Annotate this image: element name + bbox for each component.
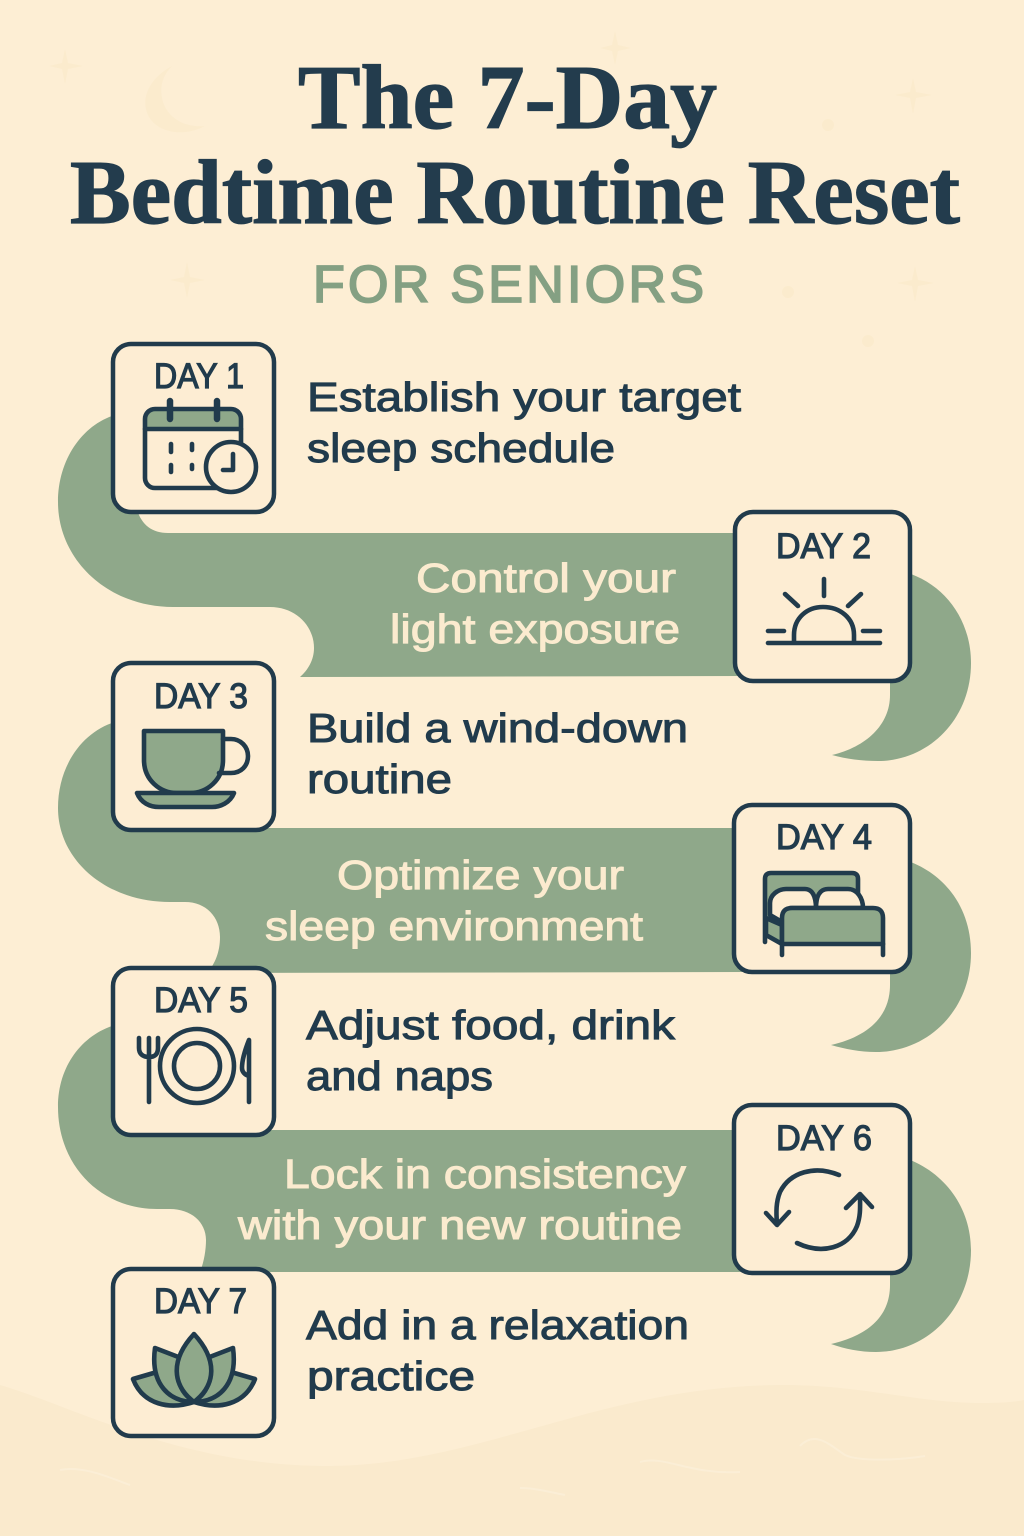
day 2 label: DAY 2 bbox=[776, 527, 871, 566]
icon: bed bbox=[765, 873, 883, 955]
day 4 badge bbox=[734, 805, 910, 972]
day 7 badge bbox=[113, 1269, 274, 1436]
day 4 text: sleep environment bbox=[265, 903, 644, 949]
day 5 text bbox=[306, 1002, 676, 1099]
day 7 text bbox=[306, 1302, 689, 1399]
day 1 text: Establish your target bbox=[307, 374, 742, 420]
title: Bedtime Routine Reset bbox=[70, 142, 960, 243]
icon: tea cup bbox=[137, 731, 248, 807]
day 1 text: sleep schedule bbox=[307, 425, 615, 471]
icon: calendar with clock bbox=[144, 401, 256, 492]
title bbox=[70, 47, 960, 243]
icon: cycle arrows bbox=[766, 1170, 872, 1249]
day 1 text bbox=[307, 374, 742, 471]
day 4 label: DAY 4 bbox=[776, 818, 872, 857]
ribbon: days 3 to 5 bbox=[58, 722, 971, 1052]
day 6 badge bbox=[734, 1105, 910, 1273]
ribbon: days 5 to 7 bbox=[58, 1025, 971, 1352]
day 4 text: Optimize your bbox=[337, 852, 624, 898]
icon: lotus bbox=[133, 1334, 255, 1405]
day 3 badge bbox=[113, 663, 274, 830]
day 6 text: with your new routine bbox=[237, 1202, 682, 1248]
background stars and moon bbox=[49, 31, 934, 347]
day 3 text: routine bbox=[307, 756, 452, 802]
day 3 label: DAY 3 bbox=[154, 677, 248, 716]
day 7 text: practice bbox=[307, 1353, 475, 1399]
icon: plate and cutlery bbox=[139, 1029, 249, 1103]
day 1 badge bbox=[113, 344, 274, 512]
panel: day 7 bbox=[113, 1269, 689, 1436]
day 5 text: Adjust food, drink bbox=[306, 1002, 676, 1048]
panel: day 1 bbox=[113, 344, 742, 512]
panel: day 4 bbox=[265, 805, 910, 972]
day 2 text bbox=[390, 555, 680, 652]
day 5 text: and naps bbox=[306, 1053, 493, 1099]
panel: day 3 bbox=[113, 663, 688, 830]
background hills bbox=[0, 1385, 1024, 1536]
day 5 badge bbox=[113, 968, 274, 1135]
day 2 badge bbox=[735, 512, 910, 681]
title: The 7-Day bbox=[298, 47, 717, 148]
day 6 label: DAY 6 bbox=[776, 1119, 872, 1158]
day 2 text: light exposure bbox=[390, 606, 680, 652]
panel: day 5 bbox=[113, 968, 676, 1135]
day 3 text bbox=[307, 705, 688, 802]
icon: sunrise bbox=[768, 579, 880, 643]
day 5 label: DAY 5 bbox=[154, 981, 248, 1020]
day 7 text: Add in a relaxation bbox=[306, 1302, 689, 1348]
day 4 text bbox=[265, 852, 644, 949]
day 3 text: Build a wind-down bbox=[307, 705, 688, 751]
day 1 label: DAY 1 bbox=[154, 357, 244, 396]
day 6 text bbox=[237, 1151, 687, 1248]
subtitle: FOR SENIORS bbox=[313, 256, 704, 314]
day 2 text: Control your bbox=[416, 555, 676, 601]
panel: day 2 bbox=[390, 512, 910, 681]
ribbon: days 1 to 3 bbox=[58, 415, 971, 761]
day 6 text: Lock in consistency bbox=[284, 1151, 687, 1197]
panel: day 6 bbox=[237, 1105, 910, 1273]
day 7 label: DAY 7 bbox=[154, 1282, 247, 1321]
